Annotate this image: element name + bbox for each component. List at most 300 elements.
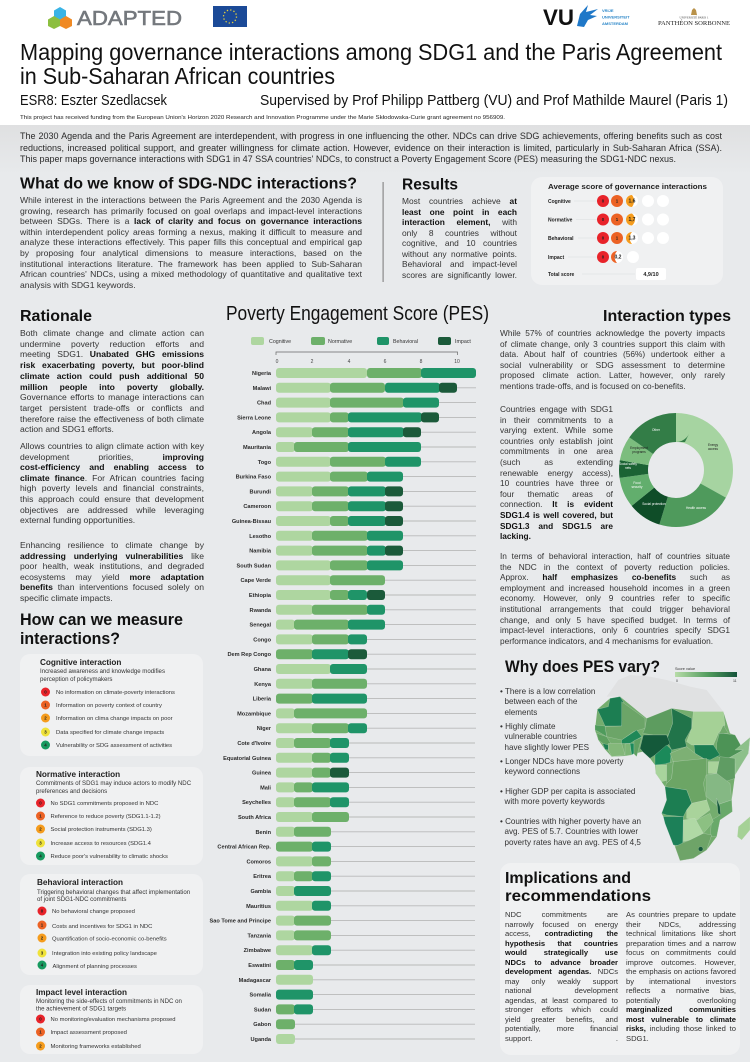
title <box>20 39 723 89</box>
text: why PES varies, bullet 5: poverty rates have an avg. PES of 4,5 <box>504 838 641 847</box>
text: what do we know: African countries' NDCs, using a mixed methodology of quantitative and qualitative text <box>20 269 362 279</box>
text: rationale 1: action and SDG1 efforts. <box>20 424 114 434</box>
text: why PES varies, bullet 2 <box>500 722 589 752</box>
panel: average score of governance interactions: 0 <box>602 198 605 204</box>
panel: behavioral interaction <box>20 874 203 975</box>
panel: average score of governance interactions: 1,3 <box>629 236 636 242</box>
bar chart: PES by country: Senegal <box>250 623 271 629</box>
heading: implications and recommendations <box>505 870 651 905</box>
donut chart: thematic SDG1 areas: programs <box>632 450 646 454</box>
map legend: score value: Score value <box>675 667 695 671</box>
text: implications column 2: the emphasis on actions favored <box>626 967 736 976</box>
donut chart: thematic SDG1 areas: Other <box>652 428 661 432</box>
text: introduction <box>20 131 722 164</box>
text: why PES varies, bullet 4: with more poverty keywords <box>504 797 605 806</box>
text: interaction types 3 <box>500 551 730 646</box>
text: why PES varies, bullet 2: vulnerable countries <box>504 732 577 741</box>
donut chart: thematic SDG1 areas: Employment <box>630 446 648 450</box>
heading: how can we measure interactions <box>20 610 183 648</box>
bar chart: PES by country: Rwanda <box>250 608 272 614</box>
panel: cognitive interaction: Increased awareness and knowledge modifies <box>40 668 165 675</box>
map legend: score value <box>675 667 737 683</box>
map legend: score value: 0 <box>676 679 678 683</box>
text: interaction types 3: impact-level interactions, only 6 countries specify SDG1 <box>500 625 730 635</box>
bar chart: PES by country: Ethiopia <box>249 593 272 599</box>
bar chart: PES by country: Cape Verde <box>241 578 271 584</box>
panel: normative interaction: 3 <box>39 840 42 846</box>
bar chart: PES by country: Gambia <box>250 889 272 895</box>
logo: Paris 1 Pantheon Sorbonne <box>658 8 730 27</box>
text: rationale 1: therefore raise the effectiveness of both climate <box>20 414 204 424</box>
panel: cognitive interaction: perception of policymakers <box>40 676 112 683</box>
bar chart: PES by country: Guinea-Bissau <box>232 519 272 525</box>
bar chart: PES by country: Gabon <box>253 1022 272 1028</box>
text: what do we know: by proposing four analytical dimensions to measure interactions, based on the <box>20 248 362 258</box>
text: introduction: The 2030 Agenda and the Paris Agreement are interdependent, with progress in one influencing the other. NDCs can drive SDG achievements, offering benefits such as cost <box>20 131 722 141</box>
heading: rationale: Rationale <box>20 308 92 325</box>
text: interaction types 3: the NDC in the context of poverty reduction policies. <box>500 562 730 572</box>
text: rationale 3: addressing underlying vulnerabilities like <box>20 551 204 561</box>
panel: impact level interaction: Monitoring frameworks established <box>50 1044 141 1050</box>
heading: implications and recommendations: Implications and <box>505 870 631 887</box>
text: interaction types 1: While 57% of countries acknowledge the poverty impacts <box>500 328 725 338</box>
text: rationale 3: Enhancing resilience to climate change by <box>20 540 204 550</box>
text: interaction types 2: renewable energy access), <box>500 468 613 478</box>
text: rationale 2: cost-efficiency and enabling access to <box>20 462 204 472</box>
text: rationale 3: poor health, weak institutions, and degraded <box>20 561 204 571</box>
text: why PES varies, bullet 5: avg. PES of 5.7. Countries with lower <box>504 827 638 836</box>
bar chart: PES by country: Mozambique <box>237 711 271 717</box>
bar chart: PES by country: Benin <box>255 830 272 836</box>
panel: average score of governance interactions: 1 <box>616 236 619 240</box>
logo: VU Amsterdam: AMSTERDAM <box>602 21 629 26</box>
text: why PES varies, bullet 2: • Highly climate <box>500 722 555 731</box>
text: what do we know: within interdependent policy areas forming a nexus, making it difficult to measure and <box>20 227 362 237</box>
text: rationale 2: objectives are addressed while leveraging <box>20 505 204 515</box>
text: implications column 1: access, contradicting the <box>505 929 618 938</box>
text: implications column 2: risks, including those linked to <box>626 1024 736 1033</box>
panel: normative interaction: Social protection instruments (SDG1.3) <box>50 827 152 833</box>
bar chart axis: 8 <box>420 359 423 365</box>
donut chart: thematic SDG1 areas: Social safety <box>619 462 637 466</box>
panel: average score of governance interactions <box>531 177 723 285</box>
text: why PES varies, bullet 3 <box>500 757 624 776</box>
bar chart: PES by country: Zimbabwe <box>244 948 271 954</box>
text: interaction types 3: change, and only 5 have specified budget. In terms of <box>500 615 730 625</box>
panel: cognitive interaction: 0 <box>44 690 47 694</box>
panel: behavioral interaction: 2 <box>41 936 44 940</box>
text: why PES varies, bullet 5 <box>500 817 641 847</box>
text: interaction types 2: SDG1.3 and SDG1.5 are <box>500 521 613 531</box>
bar chart axis: 2 <box>311 359 314 365</box>
panel: cognitive interaction: 3 <box>44 730 47 734</box>
text: implications column 1: may only weakly support <box>505 976 618 986</box>
donut chart: thematic SDG1 areas: Health access <box>686 506 706 510</box>
map legend: score value: 11 <box>733 679 737 683</box>
text: results: without any normative points. <box>402 248 517 258</box>
text: implications column 2 <box>626 910 736 1042</box>
panel: normative interaction: No SDG1 commitments proposed in NDC <box>50 801 158 807</box>
panel: impact level interaction: Impact assessment proposed <box>50 1030 127 1036</box>
text: why PES varies, bullet 4: • Higher GDP per capita is associated <box>500 787 635 796</box>
panel: average score of governance interactions: Behavioral <box>548 236 574 242</box>
text: implications column 1: potentially, more financial <box>505 1024 618 1033</box>
text: interaction types 2: commitments in one area <box>500 446 613 456</box>
panel: normative interaction: 0 <box>39 800 42 806</box>
bar chart: PES by country: Congo <box>253 637 272 643</box>
panel: behavioral interaction: No behavioral change proposed <box>52 909 135 915</box>
title: in Sub-Saharan African countries <box>20 63 335 89</box>
bar chart legend: Behavioral <box>393 339 418 345</box>
bar chart: PES by country: Angola <box>252 430 272 436</box>
bar chart: PES by country: Cote d'Ivoire <box>237 741 271 747</box>
text: interaction types 3: performance indicators, and 4 mechanisms for evaluation. <box>500 636 713 646</box>
text: what do we know: between SDGs. There is a lack of clarity and focus on governance interactions <box>20 216 362 226</box>
panel: impact level interaction: 2 <box>39 1044 42 1048</box>
text: implications column 2: focus on commitments could <box>626 948 736 957</box>
logo: Paris 1 Pantheon Sorbonne: UNIVERSITÉ PARIS 1 <box>680 14 709 20</box>
panel: average score of governance interactions: Normative <box>548 218 573 224</box>
bar chart: PES by country: Eswatini <box>248 963 271 969</box>
text: rationale 1: target persistent trade-offs or conflicts and <box>20 403 204 413</box>
panel: cognitive interaction: Information on poverty context of country <box>56 703 162 709</box>
panel: average score of governance interactions: Impact <box>548 255 564 261</box>
bar chart: PES by country: Chad <box>257 401 272 407</box>
text: results: Most countries achieve at <box>402 196 517 206</box>
panel: normative interaction <box>20 767 203 865</box>
text: implications column 2: marginalized communities <box>626 1005 736 1014</box>
bar chart: PES by country: Seychelles <box>242 800 271 806</box>
bar chart axis: 10 <box>454 359 460 365</box>
bar chart: PES by country: Sao Tome and Principe <box>210 919 271 925</box>
text: why PES varies, bullet 3: • Longer NDCs have more poverty <box>500 757 623 766</box>
panel: behavioral interaction: Behavioral interaction <box>37 878 123 887</box>
panel: behavioral interaction: 1 <box>41 922 44 928</box>
text: interaction types 1: mentions trade-offs, and is focused on co-benefits. <box>500 381 686 391</box>
text: interaction types 2: varying extent. While some <box>500 425 613 435</box>
text: implications column 1: yield greater benefits, and <box>505 1014 618 1024</box>
text: results: least one point in each <box>402 206 517 216</box>
bar chart: PES by country: South Africa <box>238 815 272 821</box>
panel: impact level interaction: Impact level interaction <box>36 988 127 997</box>
bar chart: PES by country: Mali <box>260 785 271 791</box>
panel: behavioral interaction: Triggering behavioral changes that affect implementation <box>37 889 190 896</box>
text: rationale 1: climate action could push additional 50 <box>20 371 204 381</box>
text: implications column 1: stronger efforts which could <box>505 1005 618 1014</box>
bar chart: PES by country: Sierra Leone <box>237 415 271 421</box>
text: interaction types 2: SDG1.4 is well covered, but <box>500 510 613 520</box>
logo: VU Amsterdam: UNIVERSITEIT <box>602 14 630 20</box>
bar chart: PES by country: Sudan <box>254 1007 272 1013</box>
panel: average score of governance interactions: 1 <box>616 198 619 204</box>
bar chart axis <box>276 352 460 365</box>
heading: interaction types: Interaction types <box>603 308 731 325</box>
text: rationale 3: specific climate impacts. <box>20 593 113 603</box>
text: what do we know: institutional interactions literature. The framework has been applied to Sub-Saharan <box>20 259 362 269</box>
text: rationale 1 <box>20 328 204 434</box>
text: rationale 1: meeting SDG1. Unabated GHG emissions <box>20 349 204 359</box>
heading: implications and recommendations: recommendations <box>505 888 651 905</box>
bar chart: PES by country: Kenya <box>254 682 272 688</box>
text: rationale 1: risk exacerbating poverty, but poor-blind <box>20 360 204 370</box>
bar chart: PES by country <box>210 368 476 1044</box>
panel: average score of governance interactions: 0 <box>602 217 605 222</box>
text: what do we know: growing, research has primarily focused on goal overlaps and impact-level interactions <box>20 206 362 216</box>
text: rationale 1: Both climate change and climate action can <box>20 328 204 338</box>
panel: behavioral interaction: Costs and incentives for SDG1 in NDC <box>52 924 152 930</box>
panel: normative interaction: Commitments of SDG1 may induce actors to modify NDC <box>36 780 192 787</box>
bar chart: PES by country: Uganda <box>250 1037 272 1043</box>
bar chart: PES by country: Ghana <box>254 667 272 673</box>
panel: impact level interaction <box>20 985 203 1054</box>
heading: why does PES vary: Why does PES vary? <box>505 657 660 676</box>
bar chart: PES by country: Togo <box>258 460 272 466</box>
logo: VU Amsterdam <box>543 5 630 30</box>
text: rationale 1: million people into poverty globally. <box>20 382 204 392</box>
bar chart: PES by country: Burkina Faso <box>236 475 272 481</box>
bar chart: PES by country: Liberia <box>253 697 272 703</box>
text: implications column 2: preparation times and a narrow <box>626 938 736 948</box>
panel: impact level interaction: 1 <box>39 1030 42 1034</box>
donut chart: thematic SDG1 areas: Social protection <box>642 502 666 506</box>
heading: results: Results <box>402 176 458 194</box>
text: why PES varies, bullet 3: keyword connections <box>504 767 580 776</box>
bar chart: PES by country: Namibia <box>249 549 272 555</box>
bar chart axis: 6 <box>384 359 387 365</box>
text: what do we know: analyze these interactions effectively. This paper fills this conceptual and empirical gap <box>20 237 362 247</box>
text: interaction types 2: Countries engage with SDG1 <box>500 404 613 414</box>
text: why PES varies, bullet 2: have slightly lower PES <box>504 743 589 752</box>
bar chart: PES by country: Tanzania <box>247 933 272 939</box>
text: implications column 2: potentially overlooking <box>626 996 736 1004</box>
text: implications column 2: technical limitations like short <box>626 929 736 938</box>
text: implications column 2: most vulnerable to climate <box>626 1014 736 1024</box>
text: why PES varies, bullet 1 <box>500 687 595 717</box>
title: Mapping governance interactions among SDG1 and the Paris Agreement <box>20 39 723 65</box>
logo: ADAPTED: ADAPTED <box>77 8 182 30</box>
panel: cognitive interaction <box>20 654 203 756</box>
panel: cognitive interaction: No information on climate-poverty interactions <box>56 690 175 696</box>
text: rationale 2: high poverty levels and financial constraints, <box>20 483 204 493</box>
text: interaction types 2: countries only establish joint <box>500 436 613 446</box>
text: implications column 1: development agendas. NDCs <box>505 967 618 976</box>
text: interaction types 1: of climate change, only 3 countries support this claim with <box>500 339 725 349</box>
bar chart: PES by country: Madagascar <box>239 978 272 984</box>
text: results: Behavioral and impact-level <box>402 259 517 269</box>
text: interaction types 3: Approx. half emphasizes co-benefits such as <box>500 572 730 582</box>
panel: normative interaction: 4 <box>39 854 42 858</box>
panel: behavioral interaction: 3 <box>41 950 44 956</box>
panel: average score of governance interactions: 1,6 <box>629 198 636 204</box>
bar chart: PES by country: Guinea <box>252 771 272 777</box>
panel: impact level interaction: No monitoring/evaluation mechanisms proposed <box>50 1017 176 1023</box>
text: implications column 2: reflects a normative bias, <box>626 986 736 995</box>
logo: VU Amsterdam: VRIJE <box>602 8 614 13</box>
text: rationale 2: development priorities, improving <box>20 452 204 462</box>
panel: normative interaction: Increase access to resources (SDG1.4 <box>50 841 152 847</box>
panel: behavioral interaction: Alignment of planning processes <box>52 964 137 970</box>
bar chart: PES by country: Mauritania <box>243 445 272 451</box>
text: interaction types 2: in their commitments to a <box>500 415 613 425</box>
text: interaction types 2 <box>500 404 613 541</box>
text: rationale 2: Allows countries to align climate action with key <box>20 441 204 451</box>
bar chart: PES by country: Burundi <box>250 489 271 495</box>
logo: VU Amsterdam: VU <box>543 5 574 30</box>
panel: behavioral interaction: 0 <box>41 908 44 914</box>
bar chart: PES by country: South Sudan <box>236 563 272 569</box>
text: what do we know: While interest in the interactions between the Paris Agreement and the 2030 Agenda is <box>20 195 362 205</box>
panel: impact level interaction: Monitoring the side-effects of commitments in NDC on <box>36 998 182 1005</box>
heading: poverty engagement score: Poverty Engagement Score (PES) <box>226 303 489 325</box>
bar chart: PES by country: Nigeria <box>252 371 272 377</box>
panel: average score of governance interactions: Cognitive <box>548 199 571 205</box>
panel: cognitive interaction: 4 <box>44 742 47 748</box>
panel: average score of governance interactions: 0 <box>602 236 605 240</box>
donut chart: thematic SDG1 areas: nets <box>625 466 631 470</box>
text: why PES varies, bullet 1: between each of the <box>504 697 577 706</box>
panel: cognitive interaction: Information on clima change impacts on poor <box>56 716 173 722</box>
text: results: only 8 countries without <box>402 228 517 238</box>
bar chart: PES by country: Eritrea <box>253 874 272 880</box>
text: interaction types 1 <box>500 328 725 391</box>
text: why PES varies, bullet 1: elements <box>504 708 537 717</box>
panel: average score of governance interactions: 0,2 <box>615 254 622 260</box>
logo: Paris 1 Pantheon Sorbonne: PANTHÉON SORBONNE <box>658 19 730 27</box>
text: what do we know <box>20 195 362 290</box>
text: implications column 1: national development <box>505 986 618 995</box>
text: implications column 1: would strategically use <box>505 948 618 957</box>
text: rationale 1: undermine poverty reduction efforts and <box>20 339 204 349</box>
bar chart: PES by country: Central African Rep. <box>217 845 271 851</box>
donut chart: thematic SDG1 areas: access <box>708 447 718 451</box>
text: implications column 1: NDC commitments are <box>505 910 618 919</box>
map: PES across Africa <box>595 675 750 861</box>
bar chart axis: 4 <box>348 359 351 365</box>
text: interaction types 1: proposed climate action. Latter, however, only rarely <box>500 370 725 380</box>
panel: average score of governance interactions: Total score <box>548 272 575 278</box>
panel: behavioral interaction: Integration into existing policy landscape <box>52 951 157 957</box>
text: interaction types 2: (such as extending <box>500 457 613 467</box>
panel: cognitive interaction: 1 <box>44 702 47 708</box>
text: interaction types 3: In terms of behavioral interaction, half of countries situate <box>500 551 730 561</box>
heading: how can we measure interactions: interactions? <box>20 629 120 648</box>
text: interaction types 3: employment and increased household incomes in a green <box>500 583 730 593</box>
panel: impact level interaction: 0 <box>39 1016 42 1022</box>
text: rationale 2 <box>20 441 204 525</box>
author: ESR8: Eszter Szedlacsek <box>20 92 167 109</box>
text: rationale 3: ecosystems may yield more adaptation <box>20 572 204 582</box>
text: implications column 1: agendas, at least compared to <box>505 996 618 1004</box>
panel: normative interaction: 2 <box>39 826 42 832</box>
text: implications column 2: improve outcomes. However, <box>626 958 736 966</box>
supervisors: Supervised by Prof Philipp Pattberg (VU) and Prof Mathilde Maurel (Paris 1) <box>260 92 728 109</box>
bar chart: PES by country: Dem Rep Congo <box>227 652 272 658</box>
text: results: interaction element, with <box>402 217 517 227</box>
panel: average score of governance interactions: 0 <box>602 254 605 260</box>
text: implications column 1: support. . <box>505 1034 618 1042</box>
panel: average score of governance interactions: 1,7 <box>629 217 636 223</box>
text: why PES varies, bullet 5: • Countries with higher poverty have an <box>500 817 641 826</box>
text: rationale 3: benefits than interventions focused solely on <box>20 582 204 592</box>
bar chart: PES by country: Niger <box>257 726 272 732</box>
text: rationale 2: external funding opportunities. <box>20 515 135 525</box>
text: results: scores are significantly lower. <box>402 270 517 280</box>
bar chart: PES by country: Malawi <box>253 386 271 392</box>
bar chart legend: Cognitive <box>269 339 291 345</box>
panel: implications background <box>500 863 740 1055</box>
panel: cognitive interaction: Data specified for climate change impacts <box>56 730 164 736</box>
text: implications column 2: As countries prepare to update <box>626 910 736 919</box>
panel: normative interaction: Reference to reduce poverty (SDG1.1-1.2) <box>50 814 161 820</box>
panel: cognitive interaction: Vulnerability or SDG assessment of activities <box>56 743 172 749</box>
text: introduction: reductions, increased political support, and greater willingness for climate action. However, evidence on their interaction is limited, particularly in Sub-Saharan Africa (SSA). <box>20 142 722 152</box>
text: implications column 2: their NDCs, addressing <box>626 920 736 928</box>
text: introduction: This paper maps governance interactions with SDG1 in 47 SSA countries' NDCs, to construct a Poverty Engagement Score (PES) measuring the SDG1-NDC nexus. <box>20 154 676 164</box>
text: results: cognitive, and 10 countries <box>402 238 517 248</box>
text: why PES varies, bullet 1: • There is a low correlation <box>500 687 595 696</box>
donut chart: thematic SDG1 areas: security <box>632 485 643 489</box>
panel: cognitive interaction: Cognitive interaction <box>40 658 121 667</box>
bar chart: PES by country: Equatorial Guinea <box>223 756 272 762</box>
panel: behavioral interaction: 4 <box>41 962 44 968</box>
bar chart: PES by country: Comoros <box>246 859 271 865</box>
donut chart: thematic SDG1 areas <box>619 428 718 512</box>
heading: how can we measure interactions: How can we measure <box>20 610 183 629</box>
text: implications column 2: by international investors <box>626 976 736 986</box>
text: interaction types 2: lacking. <box>500 531 531 541</box>
text: interaction types 2: connection. It is evident <box>500 499 613 509</box>
panel: normative interaction: Normative interaction <box>36 770 120 779</box>
divider <box>382 182 384 282</box>
panel: normative interaction: preferences and decisions <box>36 788 107 795</box>
text: interaction types 2: four thematic areas of <box>500 489 613 499</box>
panel: normative interaction: 1 <box>39 814 42 818</box>
donut chart: thematic SDG1 areas: Food <box>633 481 641 485</box>
text: why PES varies, bullet 4 <box>500 787 635 806</box>
bar chart: PES by country: Cameroon <box>243 504 272 510</box>
logo: EU flag <box>213 6 247 27</box>
bar chart: PES by country: Somalia <box>250 993 272 999</box>
text: rationale 1: Governance efforts to manage interactions can <box>20 392 204 402</box>
panel: cognitive interaction: 2 <box>44 716 47 720</box>
text: implications column 1: NDCs to advance broader <box>505 958 618 966</box>
bar chart legend: Normative <box>328 339 352 345</box>
text: implications column 2: SDG1. <box>626 1034 649 1042</box>
text: interaction types 1: data. About half of countries (56%) undertook either a <box>500 349 725 359</box>
text: rationale 2: climate finance. For African countries facing <box>20 473 204 483</box>
bar chart: PES by country: Mauritius <box>246 904 271 910</box>
panel: behavioral interaction: of joint SDG1-NDC commitments <box>37 896 126 903</box>
text: interaction types 2: 10 countries have three or <box>500 478 613 488</box>
text: implications column 1: narrowly focused on energy <box>505 920 618 928</box>
text: results <box>402 196 517 280</box>
text: interaction types 3: institutional arrangements that could trigger behavioral <box>500 604 730 614</box>
text: rationale 3 <box>20 540 204 603</box>
funding note: This project has received funding from the European Union's Horizon 2020 Research and Innovation Programme under the Marie Skłodowska-Curie grant agreement no 956909. <box>20 115 505 121</box>
text: what do we know: analysis with SDG1 keywords. <box>20 280 136 290</box>
panel: average score of governance interactions: Average score of governance interactions <box>548 184 707 191</box>
donut chart: thematic SDG1 areas: Energy <box>708 443 718 447</box>
panel: average score of governance interactions: 1 <box>616 217 619 222</box>
panel: behavioral interaction: Quantification of socio-economic co-benefits <box>52 936 167 942</box>
panel: impact level interaction: the achievement of SDG1 targets <box>36 1006 126 1012</box>
bar chart legend <box>251 337 471 345</box>
logo: ADAPTED <box>48 7 182 30</box>
bar chart: PES by country: Lesotho <box>249 534 272 540</box>
panel: average score of governance interactions: 4,9/10 <box>643 272 659 278</box>
bar chart legend: Impact <box>455 339 471 345</box>
text: interaction types 3: economy. However, only 9 countries refer to specific <box>500 593 730 603</box>
